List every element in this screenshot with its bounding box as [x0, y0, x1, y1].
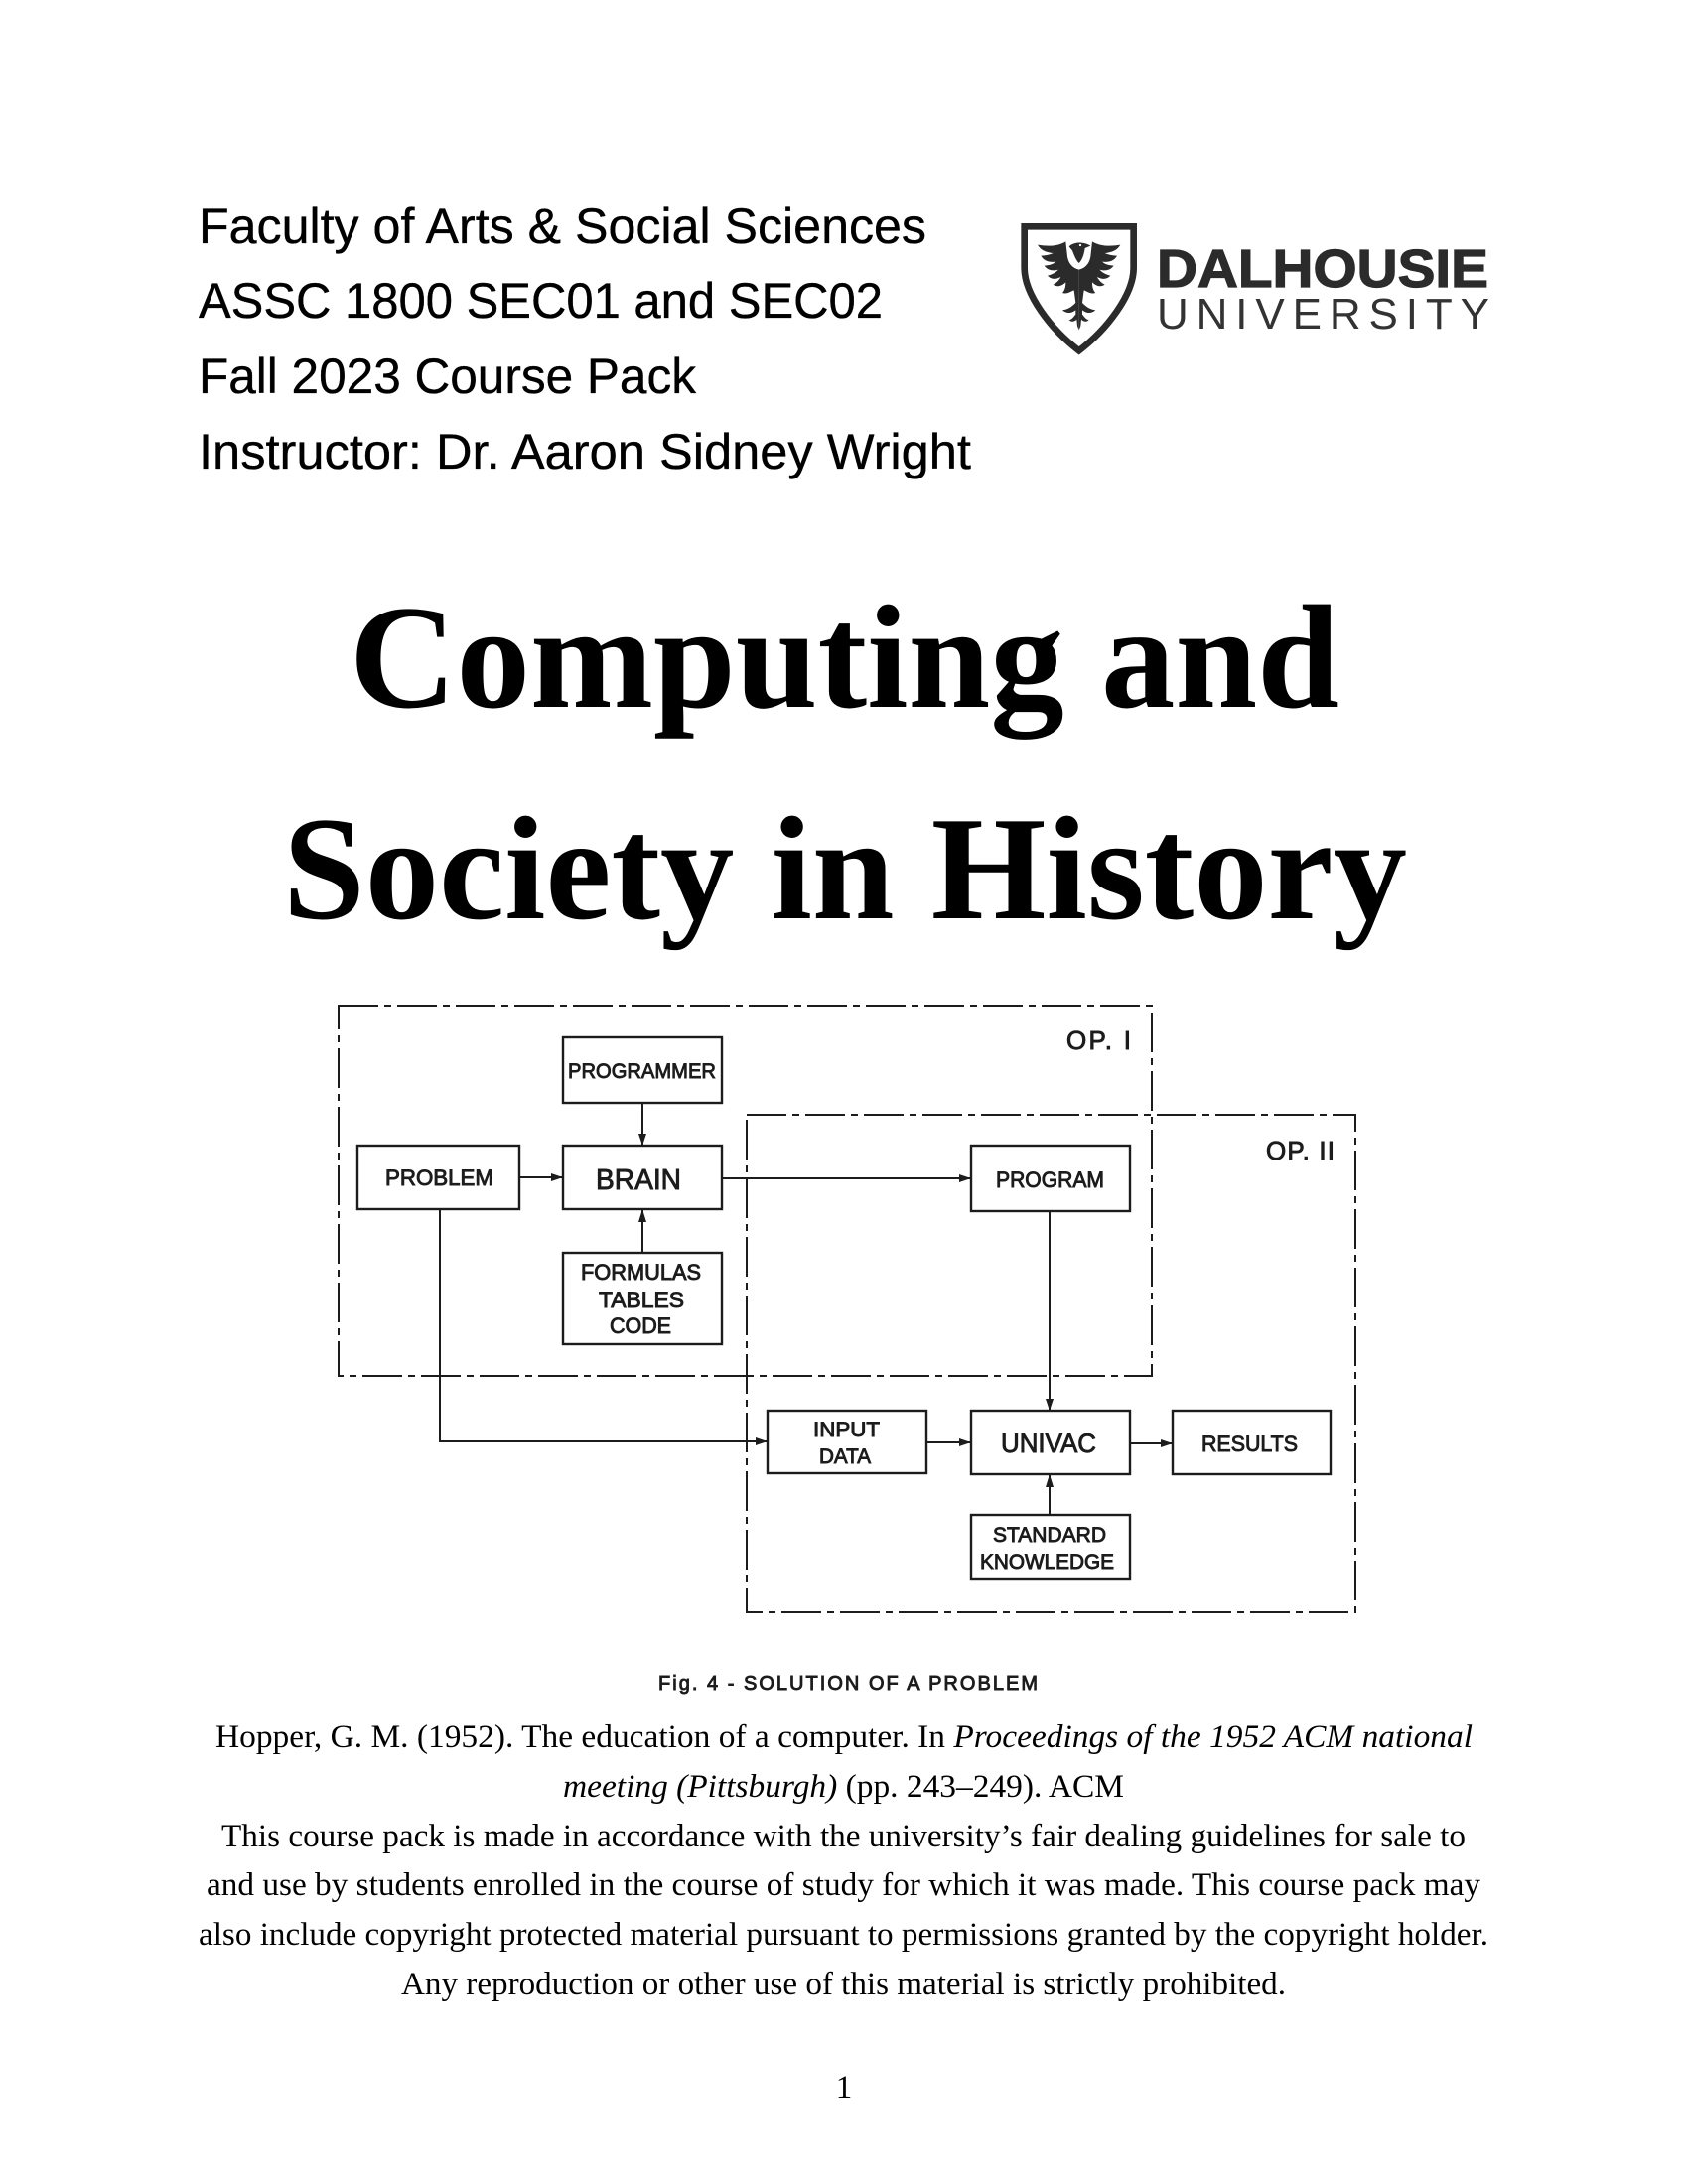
arrow: input data to univac	[926, 1438, 971, 1446]
title	[283, 576, 1407, 951]
citation and copyright notice: and use by students enrolled in the course of study for which it was made. This course pack may	[207, 1867, 1480, 1903]
box: program	[971, 1146, 1130, 1211]
box: results	[1173, 1411, 1331, 1474]
citation and copyright notice: Any reproduction or other use of this material is strictly prohibited.	[401, 1967, 1286, 2002]
title: Computing and	[350, 576, 1339, 740]
course information heading: Instructor: Dr. Aaron Sidney Wright	[199, 424, 971, 479]
panel: operation II boundary: OP. II	[1266, 1136, 1335, 1165]
box: formulas, tables, code: CODE	[610, 1313, 671, 1338]
box: problem	[357, 1146, 519, 1209]
box: univac	[971, 1411, 1130, 1474]
box: programmer: PROGRAMMER	[568, 1060, 716, 1083]
title: Society in History	[283, 787, 1407, 951]
arrow: problem to brain	[519, 1173, 563, 1181]
course information heading: Fall 2023 Course Pack	[199, 348, 697, 404]
box: program: PROGRAM	[996, 1167, 1104, 1192]
arrow: programmer to brain	[638, 1103, 646, 1146]
arrow: program to univac	[1046, 1211, 1054, 1411]
icon: eagle shield	[1025, 226, 1134, 350]
logo wordmark	[1157, 239, 1489, 339]
box: univac: UNIVAC	[1001, 1429, 1096, 1458]
arrow: univac to results	[1130, 1439, 1173, 1447]
box: standard knowledge: STANDARD	[993, 1524, 1106, 1547]
box: formulas, tables, code: FORMULAS	[581, 1260, 701, 1285]
page number: 1	[836, 2070, 852, 2106]
box: standard knowledge	[971, 1515, 1130, 1579]
figure caption: Fig. 4 - SOLUTION OF A PROBLEM	[658, 1673, 1038, 1695]
arrow: brain to program	[722, 1174, 971, 1182]
box: input data	[768, 1411, 926, 1473]
box: input data: DATA	[819, 1445, 871, 1468]
course information heading: ASSC 1800 SEC01 and SEC02	[199, 273, 883, 329]
course information heading: Faculty of Arts & Social Sciences	[199, 199, 926, 254]
box: brain	[563, 1146, 722, 1209]
box: results: RESULTS	[1201, 1432, 1298, 1456]
citation and copyright notice: meeting (Pittsburgh) (pp. 243–249). ACM	[563, 1769, 1124, 1805]
citation and copyright notice: also include copyright protected material pursuant to permissions granted by the copyright holder.	[199, 1917, 1488, 1953]
citation and copyright notice: This course pack is made in accordance with the university’s fair dealing guidelines for sale to	[221, 1819, 1466, 1854]
citation and copyright notice: Hopper, G. M. (1952). The education of a computer. In Proceedings of the 1952 ACM national	[215, 1719, 1473, 1755]
panel: operation I boundary	[339, 1006, 1152, 1376]
logo wordmark: DALHOUSIE	[1157, 239, 1488, 299]
logo wordmark: UNIVERSITY	[1157, 290, 1489, 339]
box: formulas, tables, code	[563, 1253, 722, 1344]
box: formulas, tables, code: TABLES	[599, 1288, 684, 1312]
course information heading	[199, 199, 971, 479]
arrow: formulas to brain	[638, 1209, 646, 1253]
panel: operation I boundary: OP. I	[1066, 1025, 1131, 1055]
box: input data: INPUT	[813, 1419, 880, 1441]
box: brain: BRAIN	[596, 1164, 681, 1196]
arrow: problem to input data	[440, 1209, 768, 1445]
arrow: standard knowledge to univac	[1046, 1474, 1054, 1515]
box: programmer	[563, 1037, 722, 1103]
citation and copyright notice	[199, 1719, 1488, 2002]
box: problem: PROBLEM	[385, 1165, 493, 1190]
flow diagram: solution of a problem	[339, 1006, 1355, 1695]
box: standard knowledge: KNOWLEDGE	[980, 1551, 1114, 1573]
logo: Dalhousie University	[1025, 226, 1489, 350]
panel: operation II boundary	[747, 1115, 1355, 1612]
